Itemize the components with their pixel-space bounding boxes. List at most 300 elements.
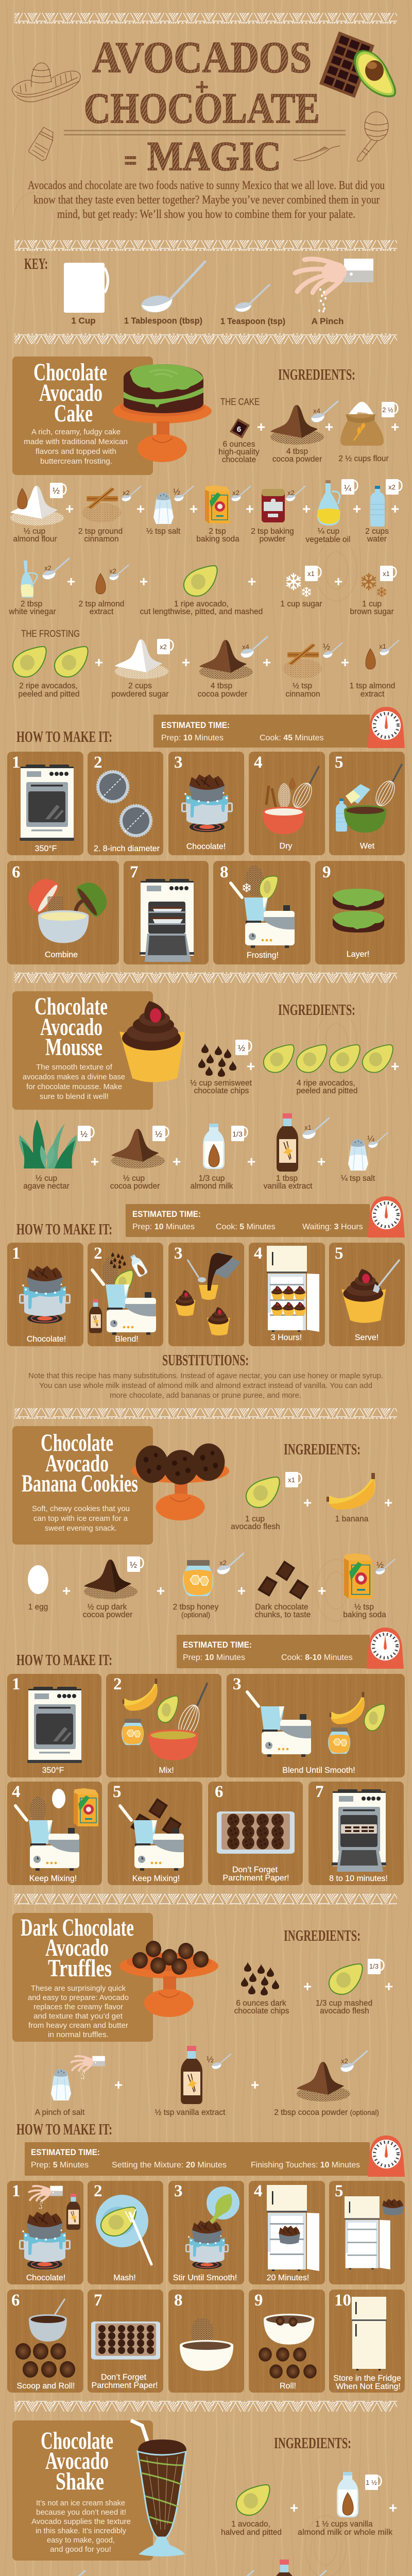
ingredient: milk: almond milk or whole milk [298, 2528, 392, 2537]
step 4: dry ingredients: Dry [280, 842, 292, 851]
step 9: roll [249, 2290, 325, 2393]
ingredient: avocado: 1 avocado, [231, 2520, 270, 2529]
ingredient: vegetable oil: ¼ cup [318, 527, 339, 536]
icon: sombrero outline [12, 63, 80, 102]
recipe card: chocolate avocado shake [12, 2420, 153, 2561]
plus: + [317, 1154, 325, 1170]
recipe title [33, 359, 107, 427]
recipe description: and easy to prepare: Avocado [28, 1993, 129, 2002]
heading: how to make it: HOW TO MAKE IT: [16, 1651, 112, 1669]
ingredient: chocolate chips: ½ [238, 1043, 245, 1053]
key: cup: 1 Cup [71, 316, 96, 326]
estimated time bar: ESTIMATED TIME: [183, 1640, 252, 1650]
ingredient: cocoa powder: x2 [341, 2057, 348, 2065]
ingredient: almond milk: 1/3 [232, 1130, 243, 1138]
step 7: bake cookies: 7 [315, 1783, 323, 1801]
step 3: blend until smooth: Blend Until Smooth! [282, 1766, 355, 1775]
ingredient: almond extract [79, 565, 128, 616]
ingredient: almond flour: ½ cup [24, 527, 45, 536]
ingredient: flour: 2 ½ cups flour [338, 454, 389, 463]
plus: + [247, 1058, 255, 1074]
step 3: stir until smooth: Stir Until Smooth! [173, 2274, 237, 2282]
plus: + [140, 573, 148, 589]
step 7: bake [124, 861, 209, 964]
ingredient: baking soda: baking soda [343, 1611, 386, 1619]
ingredient: powdered sugar: powdered sugar [111, 690, 169, 699]
ingredient: avocado flesh: x1 [288, 1476, 295, 1484]
ingredient: cocoa powder: 4 tbsp [286, 447, 308, 456]
ingredient: honey: (optional) [181, 1611, 210, 1619]
step 3: stir until smooth [168, 2181, 244, 2284]
ingredient: chocolate: 6 [237, 425, 241, 434]
ingredient: baking soda: 2 tsp [209, 527, 226, 536]
ingredient: almond milk [191, 1124, 247, 1191]
step 8: cocoa bowl [168, 2290, 244, 2393]
ingredient: salt: ½ [173, 487, 180, 497]
ingredient: salt: ¼ [367, 1134, 375, 1144]
step 7: parchment tray [88, 2290, 163, 2393]
step 2: mix: 2 [113, 1675, 122, 1693]
ingredient: brown sugar: 1 cup [362, 600, 382, 608]
step 3: stir until smooth: 3 [174, 2182, 182, 2200]
key heading: KEY: [24, 255, 48, 273]
zigzag border [14, 333, 397, 344]
step 4: refrigerate: 4 [254, 1244, 263, 1263]
recipe title: Mousse [45, 1033, 102, 1061]
plus: + [251, 2077, 259, 2093]
subheading: the frosting: THE FROSTING [21, 629, 80, 639]
ingredient: pinch of salt: A pinch of salt [35, 2108, 85, 2117]
ingredient: mashed avocado: 1/3 cup mashed [316, 1999, 372, 2008]
ingredient: dark cocoa powder: ½ cup dark [88, 1603, 127, 1612]
ingredient: banana: 1 banana [335, 1515, 369, 1523]
recipe title: Chocolate [33, 359, 107, 386]
ingredient: avocados: peeled and pitted [19, 690, 79, 699]
ingredient: chocolate [218, 418, 260, 464]
ingredient: cocoa powder [270, 401, 338, 464]
step 6: combine: Combine [45, 951, 78, 959]
ingredient: almond extract: extract [360, 690, 385, 699]
illustration: truffles on stand [119, 1941, 218, 2017]
recipe description [32, 1504, 130, 1533]
substitutions text: Note that this recipe has many substitutions. Instead of agave nectar, you can use honey or maple syrup. [28, 1371, 383, 1380]
estimated time bar [25, 2136, 405, 2177]
ingredient: white vinegar: white vinegar [8, 607, 56, 616]
step 4: keep mixing [7, 1782, 102, 1885]
ingredient: vanilla extract: ½ [207, 2055, 214, 2064]
ingredient: honey: x2 [219, 1559, 227, 1567]
plus: + [173, 1154, 181, 1170]
ingredient: almond milk: 1/3 cup [199, 1174, 225, 1183]
step 7: parchment tray: 7 [94, 2291, 102, 2310]
step 2: blend [88, 1243, 163, 1346]
ingredient: avocados: 2 ripe avocados, [19, 682, 78, 690]
ingredient: avocado: 1 ripe avocado, [174, 600, 229, 608]
ingredient: powdered sugar [111, 639, 173, 699]
key section [24, 255, 373, 326]
recipe title: Avocado [39, 379, 102, 406]
ingredient: dark cocoa powder [83, 1556, 143, 1619]
title line: chocolate: CHOCOLATE [84, 84, 320, 132]
recipe description: easy to make, good, [47, 2536, 115, 2545]
step 1: oven: 1 [12, 753, 21, 772]
step 3: melt chocolate: Chocolate! [186, 842, 226, 851]
step 9: layer: Layer! [347, 950, 369, 959]
illustration: cookies on stand [131, 1444, 229, 1520]
step 5: store bowl: 5 [335, 2182, 343, 2200]
recipe card: chocolate avocado banana cookies [12, 1426, 153, 1545]
ingredient: cinnamon: cinnamon [285, 690, 320, 699]
zigzag border [14, 2401, 397, 2412]
step 2: mash: 2 [94, 2182, 102, 2200]
ingredient: mashed avocado: 1/3 [369, 1962, 379, 1970]
key: teaspoon [220, 285, 285, 326]
step 10: store in fridge: 10 [334, 2291, 351, 2310]
step 1: chocolate [7, 2181, 83, 2284]
ingredient: cocoa powder [198, 637, 267, 699]
step 10: store in fridge: Store in the Fridge [333, 2374, 401, 2383]
recipe description: sure to blend it well! [40, 1092, 109, 1101]
step 2: pans: 2. 8-inch diameter [94, 844, 160, 853]
recipe description: in this shake. It’s incredibly [36, 2527, 126, 2535]
step 9: roll: Roll! [280, 2382, 296, 2391]
plus: + [302, 501, 311, 517]
recipe title [21, 1914, 134, 1982]
ingredient: almond extract: x2 [109, 567, 116, 575]
substitutions text: more chocolate, add bananas or prune puree, and more. [110, 1391, 301, 1400]
ingredient: almond extract: 1 tsp almond [350, 682, 395, 690]
ingredient: baking soda: ½ tsp [354, 1603, 374, 1612]
step 1: oven [7, 1674, 101, 1777]
ingredient: cinnamon: cinnamon [84, 535, 119, 544]
key: tablespoon: 1 Tablespoon (tbsp) [124, 316, 202, 326]
intro paragraph [28, 179, 385, 221]
ingredient: four avocados: peeled and pitted [297, 1087, 357, 1095]
step 10: store in fridge [329, 2290, 405, 2393]
ingredient: almond flour: ½ [53, 486, 60, 496]
step 4: refrigerate [249, 1243, 325, 1346]
step 1: chocolate: Chocolate! [26, 2274, 65, 2282]
ingredient: cinnamon: ½ tsp [293, 682, 312, 690]
ingredient: dark chocolate chunks [255, 1561, 311, 1619]
step 5: wet ingredients [329, 752, 405, 855]
plus: + [334, 573, 342, 589]
ingredient: powdered sugar: 2 cups [128, 682, 152, 690]
ingredient: cocoa powder [110, 1126, 168, 1191]
estimated time bar [177, 1628, 404, 1669]
plus: + [391, 419, 399, 435]
ingredient: salt [146, 486, 193, 536]
ingredient: baking powder [251, 486, 305, 544]
ingredient: almond milk: almond milk [191, 1182, 233, 1191]
step 2: mash [88, 2181, 163, 2284]
step 4: refrigerate 20 minutes: 4 [254, 2182, 263, 2200]
recipe title: Banana Cookies [22, 1470, 138, 1497]
step 4: refrigerate 20 minutes [249, 2181, 325, 2284]
ingredient: white vinegar: 2 tbsp [21, 600, 42, 608]
ingredient: almond flour [10, 483, 66, 544]
step 8: frosting: Frosting! [247, 951, 279, 960]
ingredient: powdered sugar: x2 [160, 643, 167, 651]
zigzag border [14, 1894, 397, 1905]
step 6: combine [7, 861, 119, 964]
step 3: melt chocolate: 3 [174, 753, 182, 772]
ingredient: vanilla extract [260, 2560, 326, 2576]
plus: + [91, 1154, 99, 1170]
plus: + [237, 1583, 246, 1599]
ingredient: baking soda: baking soda [196, 535, 239, 544]
recipe title: Chocolate [35, 993, 108, 1020]
ingredient: cinnamon: ½ [323, 642, 330, 652]
step 1: chocolate: 1 [12, 1244, 21, 1263]
estimated time bar: Cook: 45 Minutes [260, 734, 324, 742]
ingredient: water: 2 cups [365, 527, 389, 536]
recipe description: The smooth texture of [36, 1063, 113, 1072]
ingredient: agave nectar: agave nectar [23, 1182, 70, 1191]
ingredient: almond flour: almond flour [13, 535, 57, 544]
recipe card: chocolate avocado cake [12, 357, 153, 475]
ingredient: avocado: cut lengthwise, pitted, and mashed [140, 607, 263, 616]
double rule [64, 131, 346, 135]
ingredient: cocoa powder: ½ cup [123, 1174, 145, 1183]
estimated time bar: Prep: 10 Minutes [183, 1653, 245, 1662]
plus: + [318, 1583, 326, 1599]
ingredient: chocolate chips: chocolate chips [194, 1087, 249, 1095]
ingredient: water [365, 479, 402, 544]
plus: + [384, 1495, 392, 1511]
step 5: keep mixing: Keep Mixing! [132, 1874, 180, 1883]
ingredient: brown sugar: x1 [383, 570, 390, 578]
step 5: keep mixing: 5 [113, 1783, 122, 1801]
recipe description [24, 428, 128, 466]
ingredient: cocoa powder [13, 2571, 85, 2576]
ingredient: vanilla extract [264, 1113, 329, 1191]
recipe title: Truffles [48, 1955, 112, 1982]
recipe description: A rich, creamy, fudgy cake [31, 428, 121, 436]
step 10: store in fridge: When Not Eating! [336, 2382, 401, 2391]
ingredient: banana [327, 1473, 375, 1523]
ingredient: almond extract [350, 640, 399, 699]
step 7: bake cookies [308, 1782, 404, 1885]
plus sign: + [195, 74, 209, 100]
step 7: bake cookies: 8 to 10 minutes! [329, 1874, 388, 1883]
plus: + [341, 654, 349, 670]
recipe description: for chocolate mousse. Make [26, 1082, 122, 1091]
ingredient: four avocados [264, 1045, 393, 1095]
ingredient: agave nectar [19, 1120, 94, 1191]
step 4: dry ingredients: 4 [254, 753, 263, 772]
step 1: chocolate [7, 1243, 83, 1346]
title line: magic: MAGIC [147, 134, 281, 179]
estimated time bar: Cook: 5 Minutes [216, 1223, 276, 1231]
step 9: layer: 9 [322, 863, 331, 882]
ingredient: dark chocolate chunks: Dark chocolate [255, 1603, 308, 1612]
ingredient: vanilla extract: x1 [304, 1124, 312, 1131]
ingredient: dark chocolate chips: 6 ounces dark [236, 1999, 286, 2008]
ingredient: vanilla extract: vanilla extract [264, 1182, 313, 1191]
ingredient: baking powder: x2 [287, 489, 295, 497]
substitutions text [28, 1371, 383, 1400]
ingredient: vanilla extract [155, 2046, 231, 2117]
step 3: blend until smooth [227, 1674, 405, 1777]
step 1: oven [7, 752, 83, 855]
heading: ingredients: INGREDIENTS: [284, 1440, 360, 1458]
ingredient: pinch of salt [35, 2056, 105, 2117]
ingredient: sugar: 1 cup sugar [280, 600, 322, 608]
key: cup [64, 263, 108, 326]
estimated time bar: Setting the Mixture: 20 Minutes [112, 2161, 227, 2170]
heading: how to make it: HOW TO MAKE IT: [16, 2120, 112, 2138]
recipe description: because you don’t need it! [36, 2508, 126, 2517]
step 6: parchment tray [208, 1782, 303, 1885]
heading: substitutions: SUBSTITUTIONS: [162, 1351, 249, 1369]
recipe description [28, 1984, 129, 2039]
ingredient: milk: 1 ½ cups vanilla [315, 2520, 373, 2529]
recipe description: in normal truffles. [48, 2030, 109, 2039]
ingredient: chocolate chips: ½ cup semisweet [190, 1079, 252, 1088]
recipe title [35, 993, 108, 1061]
ingredient: honey [173, 1553, 244, 1619]
estimated time bar [153, 707, 405, 748]
plus: + [389, 2500, 397, 2516]
title line: avocados: AVOCADOS [92, 32, 312, 82]
step 1: chocolate: 1 [12, 2182, 21, 2200]
recipe title: Dark Chocolate [21, 1914, 134, 1941]
recipe title: Avocado [45, 2447, 109, 2475]
zigzag border [14, 13, 397, 24]
icon: chili pepper outline [294, 146, 340, 161]
recipe title: Cake [54, 400, 93, 427]
step 3: blend until smooth: 3 [233, 1675, 241, 1693]
illustration: shake glass [131, 2420, 186, 2556]
plus: + [246, 501, 254, 517]
step 1: chocolate: Chocolate! [27, 1335, 66, 1344]
ingredient: avocado: halved and pitted [221, 2528, 282, 2537]
heading: ingredients: INGREDIENTS: [284, 1926, 360, 1944]
plus: + [303, 1495, 312, 1511]
ingredient: chocolate: chocolate [222, 455, 256, 464]
zigzag border [14, 240, 397, 251]
ingredient: four avocados: 4 ripe avocados, [297, 1079, 355, 1088]
ingredient: dark chocolate chunks: chunks, to taste [255, 1611, 311, 1619]
ingredient: baking powder: powder [260, 535, 285, 544]
ingredient: cocoa powder [274, 2051, 379, 2117]
ingredient: cocoa powder: cocoa powder [198, 690, 247, 699]
ingredient: cocoa powder: x4 [313, 407, 320, 415]
plus: + [247, 1154, 255, 1170]
ingredient: avocado flesh [231, 1472, 301, 1531]
plus: + [67, 573, 75, 589]
ingredient: white vinegar [8, 558, 69, 616]
recipe description: Soft, chewy cookies that you [32, 1504, 130, 1513]
step 6: scoop and roll [7, 2290, 83, 2393]
key: tablespoon [124, 262, 205, 326]
ingredient: dark chocolate chips: chocolate chips [234, 2007, 289, 2015]
plus: + [325, 419, 333, 435]
ingredient: cocoa powder: ½ [155, 1129, 162, 1139]
plus: + [303, 1978, 312, 1994]
step 3: melt chocolate [168, 752, 244, 855]
step 6: scoop and roll: Scoop and Roll! [17, 2382, 75, 2391]
step 4: dry ingredients [249, 752, 325, 855]
plus: + [263, 654, 271, 670]
recipe title: Chocolate [41, 2427, 113, 2454]
step 6: parchment tray: Don’t Forget [232, 1866, 278, 1874]
ingredient: mashed avocado [316, 1959, 384, 2015]
step 5: serve: 5 [335, 1244, 343, 1263]
step 4: refrigerate 20 minutes: 20 Minutes! [267, 2274, 309, 2282]
heading: how to make it: HOW TO MAKE IT: [16, 1220, 112, 1238]
ingredient: cinnamon: 2 tsp ground [78, 527, 123, 536]
recipe description [31, 2499, 131, 2554]
ingredient: salt: ½ tsp salt [146, 527, 181, 536]
ingredient: vegetable oil [305, 479, 357, 544]
ingredient: agave nectar: ½ [80, 1129, 88, 1139]
step 5: store bowl [329, 2181, 405, 2284]
step 1: oven: 350°F [42, 1766, 64, 1775]
step 1: oven: 350°F [35, 844, 57, 853]
ingredient: egg [28, 1565, 48, 1612]
ingredient: avocado flesh: 1 cup [245, 1515, 265, 1523]
recipe title: Avocado [45, 1934, 109, 1961]
ingredient: cinnamon [78, 486, 141, 544]
step 7: bake: 7 [130, 863, 138, 882]
recipe description [23, 1063, 125, 1101]
icon: salt shaker outline [29, 127, 53, 161]
ingredient: egg: 1 egg [28, 1603, 48, 1612]
ingredient: water: water [367, 535, 387, 544]
estimated time bar: ESTIMATED TIME: [161, 720, 230, 730]
ingredient: brown sugar [350, 566, 396, 616]
substitutions text: You can use whole milk instead of almond milk and almond extract instead of vanilla. You can add [39, 1381, 372, 1390]
recipe description: made with traditional Mexican [24, 437, 128, 446]
ingredient: baking powder: 2 tsp baking [251, 527, 294, 536]
ingredient: almond extract: extract [90, 607, 114, 616]
plus: + [391, 501, 399, 517]
plus: + [385, 1978, 393, 1994]
step 2: mix: Mix! [159, 1766, 174, 1775]
plus: + [353, 501, 361, 517]
ingredient: baking soda: ½ [376, 1560, 384, 1570]
recipe description: can top with ice cream for a [33, 1514, 128, 1523]
step 9: roll: 9 [254, 2291, 263, 2310]
recipe title [41, 2427, 113, 2495]
plus: + [65, 501, 74, 517]
ingredient: cinnamon [283, 642, 342, 699]
recipe description: flavors and topped with [36, 447, 116, 456]
ingredient: chocolate: high-quality [218, 448, 260, 456]
ingredient: milk [298, 2472, 392, 2537]
plus: + [157, 1583, 165, 1599]
ingredient: chocolate chips [190, 1040, 252, 1095]
ingredient: dark cocoa powder: ½ [130, 1560, 137, 1570]
ingredient: almond extract: x1 [379, 642, 386, 650]
heading: ingredients: INGREDIENTS: [274, 2434, 351, 2452]
ingredient: avocado [140, 566, 263, 616]
ingredient: cocoa powder: 4 tbsp [211, 682, 232, 690]
ingredient: white vinegar: x2 [44, 564, 52, 572]
ingredient: dark chocolate chips [234, 1962, 289, 2015]
ingredient: salt: ¼ tsp salt [341, 1174, 375, 1183]
illustration: mousse cup [119, 1001, 185, 1082]
ingredient: brown sugar: brown sugar [350, 607, 394, 616]
recipe title: Avocado [45, 1450, 109, 1477]
recipe card: dark chocolate avocado truffles [12, 1913, 153, 2042]
ingredient: chocolate: 6 ounces [223, 440, 255, 449]
step 8: frosting [213, 861, 311, 964]
zigzag border [14, 972, 397, 983]
ingredient: milk: 1 ½ [366, 2479, 377, 2486]
